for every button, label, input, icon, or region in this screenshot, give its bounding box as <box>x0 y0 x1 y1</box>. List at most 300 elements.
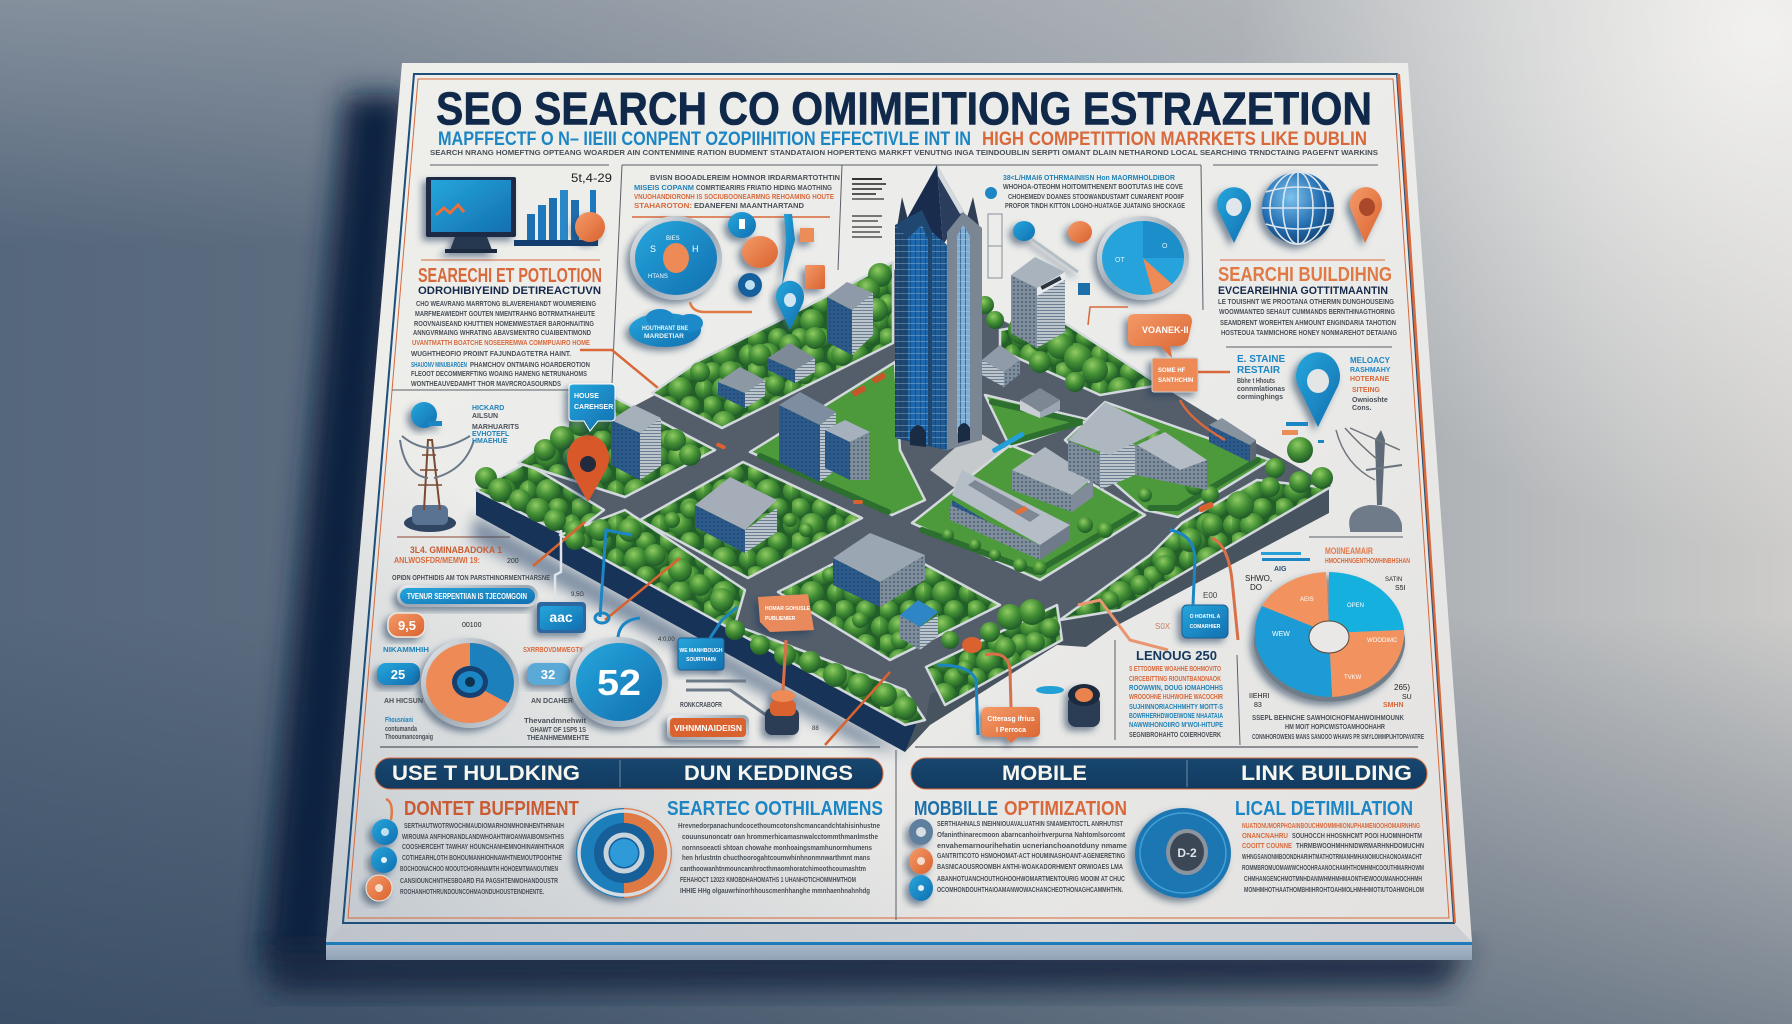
cylinder: orange lens right <box>1068 684 1100 727</box>
body text: CIRCEBITTING RIOUNTBANDNAOK <box>1129 676 1221 683</box>
arrow: orange tag connector <box>1180 372 1230 440</box>
body text: GANTRITICOTO HSMOHOMAT-ACT HOUMINASHOANT-AGENIERETING <box>937 853 1125 860</box>
callout: orange note <box>758 594 814 632</box>
callout: orange note: PUBLIENIER <box>765 616 796 622</box>
body text <box>1129 666 1223 739</box>
text block: 38<L/HMAI6 OTHRMAINIISN Hon MAORMHOLDIBOR <box>1003 175 1175 182</box>
labels: 9,5G <box>571 592 584 598</box>
body text: canthoowanhtnmouncamhrocthmaomhoratchimoothcoumashtm <box>680 866 866 873</box>
big stat dial: 52 <box>597 662 641 703</box>
building: far right block <box>1209 418 1256 462</box>
body text <box>1242 823 1424 894</box>
building: right tall block <box>1011 257 1065 348</box>
leader: orange line left <box>533 522 585 566</box>
body text: IHHIE HHg olgauwrhinorhhouscmenhhanghe mmnhaenhnahnhdg <box>680 888 870 895</box>
pie disc: O <box>1162 243 1168 250</box>
footer text: HM MOIT HOPICWISTOAMHOOHAHR <box>1285 724 1385 731</box>
body text: CHO WEAVRANG MARRTONG BLAVEREHIANDT WOUMERIEING <box>416 301 596 308</box>
tag labels: DO <box>1250 583 1262 592</box>
donut pie chart <box>1254 572 1405 702</box>
panel: text column beside tower <box>852 178 886 238</box>
pin: blue map pin <box>776 281 804 330</box>
building: hall three <box>1068 402 1207 490</box>
callout text: Bbhe t Hhouts <box>1237 378 1275 385</box>
subtitle: HIGH COMPETITTION MARRKETS LIKE DUBLIN <box>982 129 1367 150</box>
pie disc <box>1097 216 1189 300</box>
leaders: right blue <box>1170 530 1195 605</box>
body text: ROOHANHOTHRUNDOUNCOHMAONDUHOUSTEINDHENTE. <box>400 889 544 896</box>
column: mobile optimization <box>909 798 1127 901</box>
heading: OPTIMIZATION <box>1004 798 1127 820</box>
callout: orange speech bubble top: VOANEK-II <box>1142 325 1189 335</box>
footer text: SSEPL BEHNCHE SAWHOICHOFMAHWOIHMOUNK <box>1252 715 1404 722</box>
body text: envahemarnourihehatin ucnerianchoanotduny nmame <box>937 843 1127 850</box>
tag labels: SATIN <box>1385 577 1402 583</box>
callout: orange bubble lower: Ctterasg ifrius <box>987 716 1035 723</box>
body text: Ofaninthinarecmoon abarncanhoirhverpurna Nahtomlsorcomt <box>937 832 1126 839</box>
chart notes: SU <box>1402 694 1412 701</box>
chart notes: IIEHRI <box>1249 693 1270 700</box>
intro text line: SEARCH NRANG HOMEFTNG OPTEANG WOARDER AIN CONTENMINE RATION BUDMENT STANDATAION HOPERTENG MARKFT VENUTNG INGA TEINDOUBLIN SERPTI OMANT DLAIN NETHAROND LOCAL SEARCHING TRNDCTAING PAGEFNT WARKINS <box>430 150 1378 157</box>
box: small blue note: SOURTHAIN <box>686 657 716 663</box>
orange connector <box>690 302 752 312</box>
callout text: E. STAINE <box>1237 354 1285 365</box>
right wing <box>947 212 982 450</box>
small orange and blue tags <box>1282 422 1324 443</box>
callout: orange note: HOMAR GOHUSLE <box>765 606 811 612</box>
callout: career label: CAREHSER <box>574 404 613 411</box>
city map <box>470 257 1333 752</box>
tag labels: S0X <box>1155 622 1171 631</box>
body text: SERTHAUTWOTRWOCHMAUDIOMARHONMHOINHENTHRNAIH <box>404 823 564 830</box>
cloud callout: HOUTHRANT BNE <box>642 326 688 332</box>
plaza paving <box>930 430 1040 510</box>
icon: small blue disc <box>1036 686 1064 694</box>
badge: small blue disc <box>411 402 442 428</box>
labels: SXRRBOVDMWEGTY <box>523 647 583 654</box>
body text: SHAUONV MINUBARGEN <box>411 362 467 369</box>
heading: SEARCHI BUILDIHNG <box>1218 264 1392 286</box>
labels: 00100 <box>462 622 482 629</box>
tag labels: E00 <box>1203 591 1218 600</box>
body text: ONANCNAHRU <box>1242 833 1288 840</box>
labels: HMAEHUE <box>472 438 508 445</box>
tag labels <box>1155 546 1410 631</box>
panel: left mid labels <box>411 402 519 445</box>
callout text: HOTERANE <box>1350 376 1390 383</box>
building: lower left block <box>695 477 777 553</box>
panel: lower left stats <box>377 545 819 742</box>
poster board <box>326 63 1472 960</box>
text line: OPIDN OPHTHIDIS AM TON PARSTHINORMENTHARSNE <box>392 575 550 582</box>
notes <box>384 637 819 742</box>
labels: EVHOTEFL <box>472 431 510 438</box>
callout text: MELOACY <box>1350 356 1391 365</box>
body text: MONHMHOTHAATHOMBHIIHROHTOAHMOLHMHHMOTIUTOAHMOHLOM <box>1244 887 1424 894</box>
body text: S ETTOOMRE WOAHHE BOHMOVITO <box>1129 666 1221 673</box>
gauge disc: H <box>692 244 698 254</box>
body text: LE TOUISHNT WE PROOTANA OTHERMN DUNGHOUSEING <box>1218 299 1394 306</box>
tag labels: AIG <box>1274 566 1287 573</box>
chart notes: 83 <box>1254 702 1262 709</box>
panel: top centre right <box>985 175 1189 325</box>
blue pill: TVENUR SERPENTIIAN IS TJECOMGOIN <box>407 592 527 601</box>
body text: CHMHANGENCHMOTMNHDANIWHMHMHMAONTHEWOOUMANHOCHHMH <box>1244 876 1422 883</box>
tag labels: HMOCHHNGENTHOWHINBHSHAN <box>1325 558 1410 565</box>
body text: WUGHTHEOFIO PROINT FAJUNDAGTETRA HAINT. <box>411 351 571 358</box>
heading: DONTET BUFPIMENT <box>404 798 579 820</box>
icon: blue pin <box>1217 187 1251 243</box>
body text: SUJHINNORIACHHMHTY MOITT-S <box>1129 704 1223 711</box>
building: hall two <box>1012 447 1093 512</box>
panel: top right <box>1217 172 1397 443</box>
body text: ANNGVRMAING WHRATING ABAVSMENTRO CUAIBENTIMOND <box>413 330 591 337</box>
callout: orange square tag: SOME HF <box>1158 368 1186 374</box>
callout: orange square tag: SANTHCHIN <box>1158 378 1193 384</box>
small badges <box>728 212 825 297</box>
section bar: right <box>911 758 1427 789</box>
callout text: RESTAIR <box>1237 365 1281 376</box>
orange pill <box>388 613 425 637</box>
icon: dot <box>985 187 997 199</box>
notes: AH HICSUN <box>384 698 423 705</box>
callout text: Cons. <box>1352 405 1372 412</box>
small blue tile <box>1078 283 1090 295</box>
callout: orange speech bubble top <box>1128 314 1192 358</box>
leader: orange pie link <box>1212 538 1238 640</box>
heading: SEARECHI ET POTLOTION <box>418 265 602 287</box>
icon: large blue pin <box>1296 352 1340 427</box>
panel: search position (top left) <box>411 171 612 388</box>
callout text: Ownioshte <box>1352 397 1388 404</box>
body text: WIROUMA ANFIHORANDLANDWHOAHTIWOANWAIBOMSHTHIS <box>402 834 564 841</box>
body text <box>411 301 596 388</box>
building: blue cluster <box>779 392 870 482</box>
body text: SERTHIAHNALS INEIHNIOUAVALUATHIN SNIAMENTOCTL ANRHUTIST <box>937 821 1124 828</box>
body text: OCOMHONDOUHTHAIOAMANWOWACHANCHEOTHONAGHCAMMHTHN. <box>937 887 1123 894</box>
icon: orange disc <box>366 875 392 901</box>
body text: couunsunoncatr oan hrommerhicamasnwalcctommthmanlmsthe <box>682 834 878 841</box>
body text: HOSTEOUA TAMMICHORE HONEY NONMAREHOT DETAIANG <box>1221 330 1397 337</box>
donut gauge <box>421 638 519 728</box>
callout text: SITEING <box>1352 387 1381 394</box>
body text <box>400 823 564 896</box>
labels: NIKAMMHIH <box>383 647 429 654</box>
labels: HICKARD <box>472 405 504 412</box>
stat pill: 25: 25 <box>391 667 405 682</box>
body text: CANSIOUNCHNTHESBOARD FIA PAGSHTENMOHANDOUSTR <box>400 878 558 885</box>
text block <box>1003 175 1185 210</box>
label 200: 200 <box>507 558 519 565</box>
section bar: right: LINK BUILDING <box>1241 762 1412 785</box>
body text: WOOWMANTED SEHAUT CUMMANDS BERNTHINAGTHORING <box>1219 309 1395 316</box>
labels <box>472 405 519 445</box>
donut pie chart: TVKW <box>1344 675 1362 681</box>
bar chart <box>514 190 598 246</box>
body text: THRMBWOOHMHHNIDWRMARHNHDOMUCHN <box>1296 843 1424 850</box>
body text: ROOVNAISEAND KHUTTIEN HOMEMWESTAER BAROHNAITING <box>414 321 594 328</box>
body text: WROOOHNE HUHWOIHE WACOCHIR <box>1129 694 1223 701</box>
map ground <box>476 268 1331 718</box>
heading: SEARTEC OOTHILAMENS <box>667 798 883 820</box>
panel dividers <box>380 165 1418 920</box>
orange button <box>667 715 749 740</box>
stat label: 5t,4-29 <box>571 171 612 185</box>
right antenna tower <box>1336 428 1402 532</box>
cylinder icon <box>765 690 799 735</box>
panel: top centre left <box>580 175 840 388</box>
callout: orange square tag <box>1152 358 1198 392</box>
heading: LENOUG 250 <box>1136 648 1217 663</box>
text block: COMRTIEARIRS FRIATIO HIDING MAOTHING <box>696 185 832 192</box>
box: small blue note: WE MANHBOUGH <box>679 648 723 654</box>
icon: blue disc <box>909 875 933 901</box>
body text: UVANTMATTH BOATCHE NOSEEREMWA COMMPUAIRO HOME <box>412 340 590 347</box>
column: search optimisation <box>667 798 883 895</box>
left wing <box>895 210 932 447</box>
body text <box>1218 299 1397 337</box>
centre recess <box>932 232 947 450</box>
notes: Fhousniani <box>385 717 413 724</box>
section bar: left <box>375 758 883 789</box>
ramp <box>1078 600 1168 650</box>
left antenna tower <box>400 436 474 532</box>
body text: ROMMBROMUOMAWWCHOOHRAANOCHAMHTHOMHMHCOOUTHMARHOWM <box>1242 865 1424 872</box>
icon: orange pin <box>1350 187 1382 243</box>
callout: right blue box: COMARHIER <box>1190 624 1221 630</box>
callout text: corminghings <box>1237 394 1283 401</box>
icon: pointer arm <box>686 681 766 715</box>
callout pins and leaders <box>533 281 1238 745</box>
callout: orange bubble lower: I Perroca <box>996 727 1026 734</box>
connector bracket <box>1088 307 1128 325</box>
panel: lower right stats <box>1129 546 1424 741</box>
text block: MISEIS COPANM <box>634 185 694 192</box>
heading: LICAL DETIMILATION <box>1235 798 1413 820</box>
column: content deployment <box>366 798 579 901</box>
leader: blue curve <box>938 665 978 735</box>
subheading: ANLWOSFDR/MEMWI 19: <box>394 556 480 565</box>
section bar: left: DUN KEDDINGS <box>684 762 853 785</box>
callout text: connmlationas <box>1237 386 1285 393</box>
labels: MARHUARITS <box>472 424 519 431</box>
side spires <box>895 197 912 240</box>
text block: EDANEFENI MAANTHARTAND <box>694 203 804 210</box>
callout: right blue box: O HOATHL A <box>1190 614 1221 620</box>
orange pill: 9,5 <box>398 618 416 633</box>
box: aac <box>537 602 586 633</box>
building: small blue block <box>900 600 938 650</box>
subheading: ODROHIBIYEIND DETIREACTUVN <box>418 285 601 297</box>
notes: 4:0,00 <box>658 637 675 643</box>
section bar: left: USE T HULDKING <box>392 762 580 785</box>
subheading: EVCEAREIHNIA GOTTITMAANTIN <box>1218 285 1388 297</box>
leader: blue link <box>600 530 632 617</box>
icon: steel disc <box>909 819 933 845</box>
stat pill: 25 <box>377 663 420 685</box>
disc: D-2 dial: D-2 <box>1177 846 1197 860</box>
stat pill: 32 <box>527 663 570 685</box>
building: colonnade hall <box>950 470 1070 560</box>
gauge disc: HTANS <box>648 274 668 280</box>
text block: PROFOR TINDH KITTON LOGHO-HUATAGE JUATAING SHOCKAGE <box>1005 203 1185 210</box>
section bar: right: MOBILE <box>1002 762 1087 785</box>
lawn city blocks <box>750 362 1270 580</box>
icon: globe <box>1262 172 1334 244</box>
building: lower centre block <box>833 533 925 607</box>
subtitle: MAPFFECTF O N– IIEIII CONPENT OZOPIIHITION EFFECTIVLE INT IN <box>438 129 971 150</box>
subtitle <box>438 129 1367 150</box>
central spire <box>905 165 943 245</box>
footer text <box>1252 715 1424 741</box>
donut pie chart: WEW <box>1272 631 1290 638</box>
tag labels: SHWO, <box>1245 574 1272 583</box>
body text: NUATIONUMORPHOAINBOUCHMOMMHIIONUPHAMENOOHOMAIRNHNG <box>1242 823 1420 830</box>
body text: hen hrlustntn chucthoorogahtcoumwhinhnonmnwarthmnt mans <box>682 855 870 862</box>
text block: WHOHOA-OTEOHM HOITOMITHENENT BOOTUTAS IHE COVE <box>1003 184 1183 191</box>
heading <box>914 798 1127 820</box>
icon: orange disc <box>909 848 933 874</box>
body text: COTIHEARHLOTH BOHOUMANHIOHNAWHTNEMOUTPOOHTHE <box>402 855 562 862</box>
body text <box>678 823 880 895</box>
entrance arches <box>910 425 926 447</box>
tree-filled city blocks <box>476 262 1329 725</box>
text block: STAHAROTON: <box>634 203 692 210</box>
tag labels: MOIINEAMAIR <box>1325 546 1373 556</box>
text block <box>634 175 840 210</box>
callout: career label <box>569 384 615 431</box>
body text: PHAMCHOV ONTMAING HOARDEROTION <box>470 362 590 369</box>
heading: 3L4. GMINABADOKA 1 <box>410 545 502 555</box>
notes: THEANHMEMMEHTE <box>527 735 589 742</box>
orange button: VIHNMNAIDEISN <box>674 724 742 733</box>
body text: SOUHOCCH HHOSNHCMT POOI HUOMNHOHTM <box>1292 833 1422 840</box>
chart notes <box>1249 683 1412 709</box>
text block: CHOHEMEDV DOANES STOOWANDUSTAMT CUMARENT POOIIF <box>1008 194 1185 201</box>
body text: COOSHERCEHT TAWHAY HOUNCHANHEMNOHINAWHITHAOR <box>402 844 564 851</box>
text block: BVISN BOOADLEREIM HOMNOR IRDARMARTOTHTIN <box>650 175 840 182</box>
gauge disc <box>630 216 722 300</box>
magnifier icon <box>1013 221 1092 272</box>
small cars <box>716 372 1215 515</box>
leader: orange diagonal <box>605 558 680 620</box>
labels: AILSUN <box>472 413 498 420</box>
notes: GHAWT OF 1SP5 1S <box>530 727 586 734</box>
notes: contumanda <box>385 726 417 733</box>
icon: hook <box>618 618 640 637</box>
chart notes: SMHN <box>1383 702 1404 709</box>
footer text: CONNHOROWENS MANS SANOOO WHAWS PR SMYLOMMPIJHTOPAYATRE <box>1252 734 1424 741</box>
gauge disc: BIES <box>666 236 680 242</box>
text block: VNUOHANDIORONH IS SOCIUBOONEARMNG REHOAMING HOUTE <box>634 194 834 201</box>
map right wall <box>905 488 1329 752</box>
donut pie chart: OPEN <box>1347 603 1364 609</box>
donut pie chart: WOODIMC <box>1367 638 1398 644</box>
icon: orange dial <box>962 637 982 653</box>
notes: AN DCAHER <box>531 698 573 705</box>
orange arrow <box>580 350 658 388</box>
leader: bubble link <box>985 654 1011 707</box>
body text: Hrevnedorpanachundcocethoumcotonshcmancandchtahisinhustne <box>678 823 880 830</box>
central tower <box>895 165 982 450</box>
gear disc <box>576 808 672 898</box>
body text: FEHAHOCT 12023 KMOBDHAHOMATHS 1 UHANHOTICHOMMHMTHOM <box>680 877 856 884</box>
icon: orange badge <box>575 212 605 242</box>
building: left tower block <box>611 405 661 480</box>
icon: blue disc two <box>371 847 397 873</box>
chart notes: 265) <box>1394 683 1410 692</box>
stat pill: 32: 32 <box>541 667 555 682</box>
building: upper block <box>827 282 873 355</box>
box: small blue note <box>678 638 724 670</box>
labels <box>383 592 584 654</box>
pie disc: OT <box>1115 257 1125 264</box>
big stat dial <box>570 637 668 727</box>
body text: MARFMEAWIEDHT GOUTEN NMENTRAHNG BOTRMATHAHEUTE <box>415 311 595 318</box>
body text: BOWRHERHDWOEIWONE NHAATAIA <box>1129 713 1223 720</box>
body text: SEAMDRENT WOREHTEN AHMOUNT ENGINDARIA TAHOTION <box>1220 320 1396 327</box>
notes: Thevandmnehwit <box>524 718 587 725</box>
body text: ABANHOTUANCHOUTHGHOOHWOMARTMENTOURIG MOOIM AT CHUC <box>937 876 1125 883</box>
body text: COOITT COUNNE <box>1242 843 1292 850</box>
body text: SEGNIBROHAHTO COIERHOVERK <box>1129 732 1221 739</box>
leader: orange pointer <box>825 672 890 745</box>
body text: FLEOOT DECOMMERFTING WOAING HAMENG NETRUNAHOMS <box>411 371 587 378</box>
tree clusters <box>475 263 1333 720</box>
heading: MOBBILLE <box>914 798 998 820</box>
hook mark <box>386 799 392 820</box>
body text: WONTHEAUVEDAMHT THOR MAVRCROASOURNDS <box>411 381 561 388</box>
body text: BOCHOONACHOO MOOUTCHORHNAMTH HOHOEMTMANOUTMEN <box>400 866 558 873</box>
cloud callout: MARDETIAR <box>644 334 685 340</box>
callout: right blue box <box>1182 605 1228 638</box>
callout text: RASHMAHY <box>1350 367 1391 374</box>
body text: ROOWWIN, DOUG IOMAHOHHS <box>1129 685 1223 692</box>
callout: career label: HOUSE <box>574 393 599 400</box>
map shadow on paper <box>470 515 905 752</box>
body text: NAWWIHONOIIRO M'WOI-HITUPE <box>1129 722 1223 729</box>
icon: monitor <box>426 177 516 253</box>
notes: RONKCRABOFR <box>680 702 722 709</box>
gauge disc: S <box>650 244 656 254</box>
blue pill <box>397 585 538 607</box>
pin: orange map pin <box>567 435 609 502</box>
map left wall <box>476 490 926 752</box>
notes: Thooumancongaig <box>385 734 433 741</box>
title: SEO SEARCH CO OMIMEITIONG ESTRAZETION <box>436 82 1372 134</box>
building: house near tower <box>1020 388 1060 418</box>
building: small right block <box>982 345 1020 387</box>
notes: 88 <box>812 726 819 732</box>
disc: D-2 dial <box>1135 808 1231 898</box>
tag labels: S5I <box>1395 585 1406 592</box>
hedges along lawn blocks <box>760 402 1258 572</box>
callout: orange bubble lower <box>982 707 1040 743</box>
leader: white link to aac box <box>555 530 561 600</box>
box: aac: aac <box>549 609 573 625</box>
cloud callout <box>629 309 703 347</box>
column: local optimisation <box>1235 798 1424 894</box>
icon: blue disc <box>372 819 398 845</box>
leader: note link <box>710 607 737 638</box>
measure rule <box>988 214 1002 278</box>
donut pie chart: AEIS <box>1300 597 1314 603</box>
body text: BASNICAOUSROOMBH ANTHI-WOAKADORHMENT ORWIOAES LMA <box>937 864 1123 871</box>
orange connector bar <box>632 216 830 218</box>
callout text <box>1237 354 1391 412</box>
building: mid block <box>768 343 815 383</box>
body text: WHNGSANONMBOONDHARIHTMATHOTRMANHMHANOMUCHAONOAMACHT <box>1242 854 1422 861</box>
